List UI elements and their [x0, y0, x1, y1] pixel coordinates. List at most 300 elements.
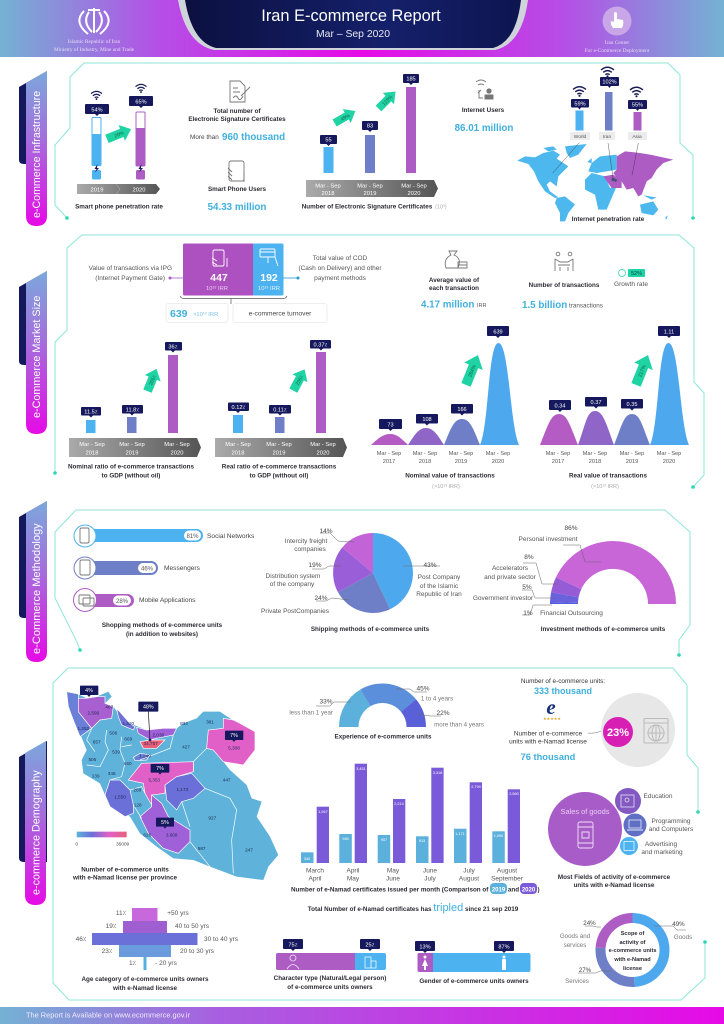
- bar values: 1,947: [318, 810, 328, 814]
- age labels: 40 to 50 yrs: [175, 923, 210, 930]
- value: 333 thousand: [534, 686, 592, 696]
- chart: real ratio to GDP: [215, 340, 347, 480]
- caption with legend pills: and: [508, 886, 519, 893]
- segment labels: services: [564, 942, 586, 949]
- segment labels: Government investor: [473, 595, 534, 602]
- slice labels: Distribution system: [266, 573, 320, 580]
- province values: 346: [108, 771, 116, 776]
- hill 2020: [650, 326, 689, 445]
- section tab: e-commerce Demography: e-commerce Demography: [30, 770, 42, 895]
- gray circle: [601, 693, 675, 767]
- bar: mobile applications: [74, 588, 196, 612]
- split bar: [418, 953, 530, 972]
- period timeline: Mar - Sep: [266, 442, 292, 448]
- caption: [81, 976, 209, 992]
- month labels: June: [386, 876, 400, 882]
- icon: building: [365, 957, 376, 968]
- period labels: 2019: [455, 459, 467, 465]
- period labels: 2020: [492, 459, 504, 465]
- province values: 506: [88, 757, 97, 762]
- right organisation name: [585, 40, 650, 54]
- segment labels: 33%: [319, 698, 333, 706]
- growth rate: [614, 269, 648, 288]
- right organisation name: Iran Center: [605, 40, 629, 46]
- period timeline: Mar - Sep: [79, 442, 105, 448]
- Asia bar: Asia: [632, 134, 642, 140]
- stat: electronic signature certificates: [188, 81, 286, 143]
- age labels: 30 to 40 yrs: [204, 936, 239, 943]
- icon: e-Namad logo: e: [546, 695, 556, 719]
- icon: e-Namad logo: ★★★★★: [543, 716, 561, 721]
- province values: 447: [223, 778, 231, 783]
- province values: 3,608: [166, 833, 178, 838]
- province values: 1,550: [114, 794, 126, 799]
- province values: 467: [105, 704, 114, 709]
- arrow 217%: 217%: [637, 364, 648, 378]
- stat label: Internet Users: [462, 107, 505, 114]
- year timeline: 2020: [133, 188, 145, 194]
- header title panel: Iran E-commerce Report: [261, 7, 441, 25]
- caption: Nominal value of transactions: [405, 472, 495, 480]
- caption: with e-Namad license per province: [72, 875, 178, 882]
- province values: 268: [133, 788, 142, 793]
- age labels: - 20 yrs: [155, 960, 178, 967]
- arrow 123%: 123%: [381, 94, 395, 107]
- centre text: license: [623, 966, 642, 972]
- centre text: with e-Namad: [613, 957, 651, 963]
- province values: 247: [245, 848, 253, 853]
- province values: 128: [134, 803, 142, 808]
- Asia bar: 55%: [632, 102, 643, 108]
- bar values: 907: [381, 838, 387, 842]
- segment labels: 1 to 4 years: [421, 696, 453, 702]
- period timeline: 2020: [317, 450, 329, 456]
- pie slices: [333, 533, 413, 613]
- caption: Nominal ratio of e-commerce transactions: [68, 464, 194, 470]
- hill 2018: 108: [422, 417, 432, 423]
- caption: (in addition to websites): [126, 631, 198, 638]
- caption: [102, 622, 223, 638]
- bar 2018: 11.5٪: [84, 410, 98, 416]
- caption: Smart phone penetration rate: [75, 204, 163, 210]
- bar: mobile applications: Mobile Applications: [139, 597, 196, 604]
- slice labels: companies: [294, 546, 326, 553]
- year timeline: [77, 184, 160, 194]
- period timeline: Mar - Sep: [119, 442, 145, 448]
- period labels: [546, 451, 681, 465]
- period timeline: 2018: [322, 191, 334, 197]
- month labels: August: [459, 876, 479, 882]
- segment labels: less than 1 year: [289, 710, 333, 716]
- right label: COD: (Cash on Delivery) and other: [298, 265, 382, 272]
- share badges: 48%: [143, 704, 154, 710]
- caption: Shopping methods of e-commerce units: [102, 622, 223, 629]
- panel frame: market size: [53, 235, 704, 489]
- blue box 192: 10¹³ IRR: [258, 286, 280, 292]
- right label: COD: Total value of COD: [313, 255, 368, 262]
- badge 87%: 87%: [498, 944, 510, 950]
- bar 2020: 36٪: [168, 344, 178, 350]
- stat value: 86.01 million: [455, 123, 513, 134]
- bracket arrow: [180, 296, 287, 304]
- section tab: e-Commerce Methodology: [19, 501, 47, 662]
- hill 2019: 0.35: [627, 402, 637, 408]
- bar 2018: [320, 135, 337, 173]
- slice labels: of the Islamic: [420, 583, 459, 590]
- month labels: May: [387, 868, 400, 874]
- caption with legend pills: 2020: [522, 887, 536, 893]
- split bar: [276, 953, 386, 970]
- caption: to GDP (without oil): [102, 472, 160, 480]
- month labels: June: [423, 868, 437, 874]
- slice labels: 14%: [319, 528, 333, 535]
- country base: [67, 692, 278, 880]
- caption: Shipping methods of e-commerce units: [311, 626, 430, 633]
- chart: investment methods half donut: [473, 525, 676, 633]
- chart: real value of transactions: [540, 326, 689, 490]
- province values: 650: [124, 761, 132, 766]
- stat label: Electronic Signature Certificates: [188, 116, 286, 123]
- caption: Experience of e-commerce units: [335, 734, 432, 740]
- slice labels: Private PostCompanies: [261, 608, 330, 615]
- province borders: [87, 728, 237, 873]
- chart: age pyramid: [76, 908, 239, 992]
- purple box 447: [183, 244, 254, 296]
- turnover breakdown: [89, 244, 382, 322]
- bubble: programming: and Computers: [649, 826, 694, 833]
- caption with legend pills: 2019: [492, 887, 506, 893]
- connector: [588, 730, 603, 733]
- bar: social networks: 81%: [186, 534, 199, 540]
- province values: 5,353: [148, 778, 161, 783]
- row percentages: 19٪: [106, 923, 117, 930]
- e-Namad label: units with e-Namad license: [509, 738, 587, 746]
- battery 2020: [136, 112, 145, 180]
- province values: 1,173: [176, 787, 189, 792]
- chart: nominal ratio to GDP: [68, 342, 201, 480]
- stat: average transaction value: [421, 251, 486, 310]
- footer band: The Report is Available on www.ecommerce.gov.ir: [26, 1010, 191, 1020]
- stat value: 54.33 million: [208, 202, 266, 213]
- period labels: [377, 451, 510, 465]
- bubble: advertising: and marketing: [641, 849, 683, 856]
- e-Namad label: [509, 730, 587, 746]
- province values: 1,252: [78, 726, 90, 731]
- chart: shopping methods: [74, 525, 255, 638]
- chart: e-Namad certificates per month: [291, 764, 540, 914]
- period labels: 2020: [663, 459, 675, 465]
- section tab: e-Commerce Market Size: e-Commerce Market Size: [31, 296, 43, 418]
- period labels: 2018: [419, 459, 431, 465]
- slice labels: of the company: [270, 581, 315, 588]
- icon: wifi 2020: [136, 84, 146, 93]
- bar values: 2,560: [509, 792, 519, 796]
- province values: 381: [206, 719, 214, 724]
- segment labels: and private sector: [484, 574, 537, 581]
- centre text: [609, 931, 656, 972]
- stat label: Smart Phone Users: [208, 186, 267, 193]
- caption: (×10¹³ IRR): [432, 484, 460, 490]
- period labels: 2019: [626, 459, 638, 465]
- period timeline: 2018: [232, 450, 244, 456]
- province values: 669: [124, 737, 133, 742]
- world map: [517, 143, 673, 221]
- period labels: Mar - Sep: [377, 451, 401, 457]
- bar values: 945: [342, 837, 349, 841]
- bar 2020: [403, 74, 419, 173]
- province values: 2,599: [88, 710, 100, 715]
- bar values: 3,318: [433, 771, 442, 775]
- bar values: 2,214: [394, 802, 404, 806]
- chart: shipping methods pie: [261, 528, 462, 633]
- month labels: March: [306, 868, 324, 874]
- bar 2019: 11.8٪: [126, 408, 139, 414]
- caption: Real value of transactions: [569, 472, 648, 480]
- bubble: sales of goods: Sales of goods: [561, 807, 610, 816]
- bar values: [304, 767, 519, 861]
- icon: web window globe: [644, 718, 668, 743]
- Asia bar: [628, 87, 647, 140]
- caption: units with e-Namad license: [574, 882, 655, 889]
- caption: (10³): [435, 204, 447, 210]
- chart: fields of activity bubbles: [548, 788, 694, 889]
- bar: messengers: [74, 557, 201, 579]
- period timeline: Mar - Sep: [401, 184, 427, 190]
- hill 2017: 73: [387, 422, 394, 428]
- row percentages: 11٪: [116, 910, 127, 917]
- section tab: e-commerce Demography: [19, 741, 47, 905]
- month labels: April: [346, 868, 360, 874]
- period timeline: Mar - Sep: [315, 184, 341, 190]
- arrow 205%: 205٪: [148, 374, 158, 386]
- left organisation name: Ministry of Industry, Mine and Trade: [54, 46, 135, 53]
- stat label: Average value of: [429, 277, 480, 284]
- share badges: 7%: [156, 766, 164, 772]
- purple box 447: 447: [210, 272, 228, 284]
- slice labels: 19%: [308, 562, 322, 569]
- period timeline: [69, 438, 201, 457]
- chart: smart phone penetration rate: [75, 84, 163, 210]
- stat label: each transaction: [429, 285, 479, 292]
- segment labels: 22%: [436, 710, 450, 717]
- arrow 49%: [331, 104, 359, 130]
- donut ring: [600, 918, 664, 982]
- period timeline: 2020: [171, 450, 183, 456]
- caption: Most Fields of activity of e-commerce: [558, 874, 671, 881]
- caption: to GDP (without oil): [250, 472, 308, 480]
- caption: [68, 464, 194, 480]
- caption: Investment methods of e-commerce units: [541, 626, 666, 633]
- segment labels: Accelerators: [492, 565, 529, 572]
- stat value: 1.5 billion: [522, 300, 567, 311]
- right label: COD: payment methods: [314, 275, 367, 282]
- bar 2019: 83: [367, 124, 373, 130]
- left organisation name: Islamic Republic of Iran: [68, 38, 121, 45]
- note: tripled: Total Number of e-Namad certificates has tripled since 21 sep 2019: [308, 902, 519, 914]
- blue box 192: [253, 244, 284, 296]
- province values: 34,767: [144, 741, 158, 746]
- arrow 284%: [457, 351, 487, 389]
- bar values: 1,090: [494, 834, 503, 838]
- segment labels: Goods and: [560, 933, 591, 940]
- header title panel: Mar – Sep 2020: [316, 29, 390, 40]
- icon: hand cursor: [602, 6, 632, 36]
- month labels: August: [497, 868, 517, 874]
- stat value: 960 thousand: [222, 132, 285, 143]
- caption: [558, 874, 671, 889]
- highlighted provinces: [67, 692, 255, 853]
- bar 2020: 0.37٪: [314, 342, 327, 348]
- turnover label: e-commerce turnover: [249, 310, 312, 318]
- bars: [301, 764, 520, 863]
- caption with legend pills: Number of e-Namad certificates issued per month (Comparison of: [291, 886, 489, 893]
- chart: experience half donut: [289, 683, 484, 740]
- period labels: Mar - Sep: [413, 451, 437, 457]
- segment labels: 27%: [579, 967, 592, 974]
- hill 2018: 0.37: [591, 400, 601, 406]
- header band: [0, 0, 724, 57]
- caption: [222, 464, 337, 480]
- arrow 217%: [627, 351, 657, 389]
- icon: signed document: [230, 81, 250, 102]
- panel frame: methodology: [55, 510, 690, 657]
- turnover value: [166, 304, 228, 322]
- segment labels: [289, 686, 484, 728]
- bar values: 913: [419, 839, 425, 843]
- section tab: e-Commerce Infrastructure: e-Commerce Infrastructure: [31, 91, 43, 218]
- stat: number of transactions: [522, 252, 603, 311]
- province values: 506: [109, 730, 118, 735]
- left label: IPG: [89, 265, 183, 282]
- chart: scope of activity donut: [560, 918, 692, 985]
- hill 2018: [578, 397, 614, 445]
- period labels: 2017: [552, 459, 564, 465]
- share badges: 5%: [161, 820, 169, 826]
- caption: (×10¹³ IRR): [591, 484, 619, 490]
- stat label: [188, 108, 286, 123]
- period labels: Mar - Sep: [583, 451, 607, 457]
- section tab: e-Commerce Infrastructure: [19, 71, 47, 226]
- arrow 236%: 236٪: [295, 374, 305, 387]
- segment labels: 86%: [564, 525, 578, 532]
- period timeline: 2019: [126, 450, 138, 456]
- province values: 834: [180, 721, 188, 726]
- bubble: education: Education: [644, 793, 673, 800]
- period timeline: 2019: [273, 450, 285, 456]
- month labels: July: [424, 876, 437, 882]
- section tab: e-Commerce Market Size: [19, 271, 47, 434]
- icon: money bag and coins: [445, 251, 467, 268]
- chart: character type: [274, 939, 386, 991]
- growth label: Growth rate: [614, 281, 648, 288]
- hill 2019: [444, 404, 480, 445]
- share badges: 4%: [85, 688, 93, 694]
- segment labels: more than 4 years: [434, 722, 484, 728]
- bar: messengers: Messengers: [164, 565, 201, 572]
- period labels: Mar - Sep: [449, 451, 473, 457]
- province values: 1,249: [139, 754, 151, 759]
- age labels: +50 yrs: [167, 910, 189, 917]
- Iran bar: Iran: [603, 134, 611, 140]
- bar 2018: 55: [325, 138, 332, 144]
- slice labels: [261, 528, 462, 615]
- caption: [569, 472, 648, 490]
- bar: social networks: [74, 525, 255, 547]
- icon: woman: [422, 956, 428, 970]
- chart: internet penetration rate: [517, 67, 673, 223]
- e-Namad label: Number of e-commerce: [514, 730, 583, 738]
- province values: 2,038: [152, 733, 165, 738]
- caption with legend pills: [291, 883, 540, 894]
- stat value: [522, 300, 603, 311]
- bar: messengers: 46%: [141, 566, 154, 572]
- age labels: 20 to 30 yrs: [180, 948, 215, 955]
- segment labels: Personal investment: [519, 536, 578, 543]
- legend: 0: [75, 842, 78, 847]
- bubble: education: [615, 788, 673, 814]
- panel frame: infrastructure: [55, 63, 695, 220]
- hill 2017: 0.34: [555, 404, 565, 410]
- caption: Age category of e-commerce units owners: [81, 976, 209, 983]
- caption: Number of Electronic Signature Certificates: [302, 204, 433, 210]
- world bar: 59%: [574, 102, 586, 108]
- centre text: e-commerce units: [609, 948, 656, 954]
- province values: 5,308: [228, 745, 240, 750]
- left organisation name: [54, 38, 135, 53]
- chart: gender: [415, 941, 530, 985]
- bar 2020: 185: [406, 77, 416, 83]
- turnover value: 639: [170, 308, 188, 320]
- centre text: Scope of: [621, 931, 644, 937]
- bar values: 1,171: [455, 832, 465, 836]
- period timeline: Mar - Sep: [225, 442, 251, 448]
- period timeline: Mar - Sep: [164, 442, 190, 448]
- stat value: 4.17 million: [421, 300, 474, 310]
- month labels: July: [463, 868, 476, 874]
- icon: two people exchanging: [555, 252, 573, 271]
- year timeline: 2019: [91, 188, 103, 194]
- period timeline: [215, 438, 347, 457]
- province values: [78, 704, 253, 853]
- period timeline: 2020: [408, 191, 420, 197]
- segment labels: 5%: [522, 584, 532, 591]
- hill 2020: 1.11: [664, 330, 674, 336]
- world bar: World: [574, 134, 587, 140]
- icon: wifi 2019: [91, 91, 102, 100]
- Iran bar: 102%: [602, 80, 617, 86]
- period timeline: 2018: [86, 450, 98, 456]
- icon: hand holding phone: [228, 161, 244, 182]
- caption: Real ratio of e-commerce transactions: [222, 464, 337, 470]
- stat: number of e-commerce units: [509, 678, 675, 767]
- bubble: programming: [624, 814, 694, 836]
- header title panel: [178, 0, 528, 50]
- month labels: May: [347, 876, 360, 882]
- badge 54%: 54%: [91, 107, 103, 113]
- segment labels: [560, 920, 692, 985]
- badge 13%: 13%: [419, 944, 431, 950]
- badge 65%: 65%: [135, 99, 147, 105]
- panel frame: demography: [53, 668, 707, 1000]
- province values: 1,620: [122, 721, 135, 726]
- segment labels: Services: [565, 978, 589, 985]
- badge 75%: 75٪: [288, 942, 298, 948]
- slice labels: Intercity freight: [285, 538, 328, 545]
- caption: Number of e-commerce units: [81, 867, 169, 874]
- month labels: [306, 868, 524, 882]
- battery 2019: [92, 118, 101, 180]
- badge 25%: 25٪: [365, 942, 375, 948]
